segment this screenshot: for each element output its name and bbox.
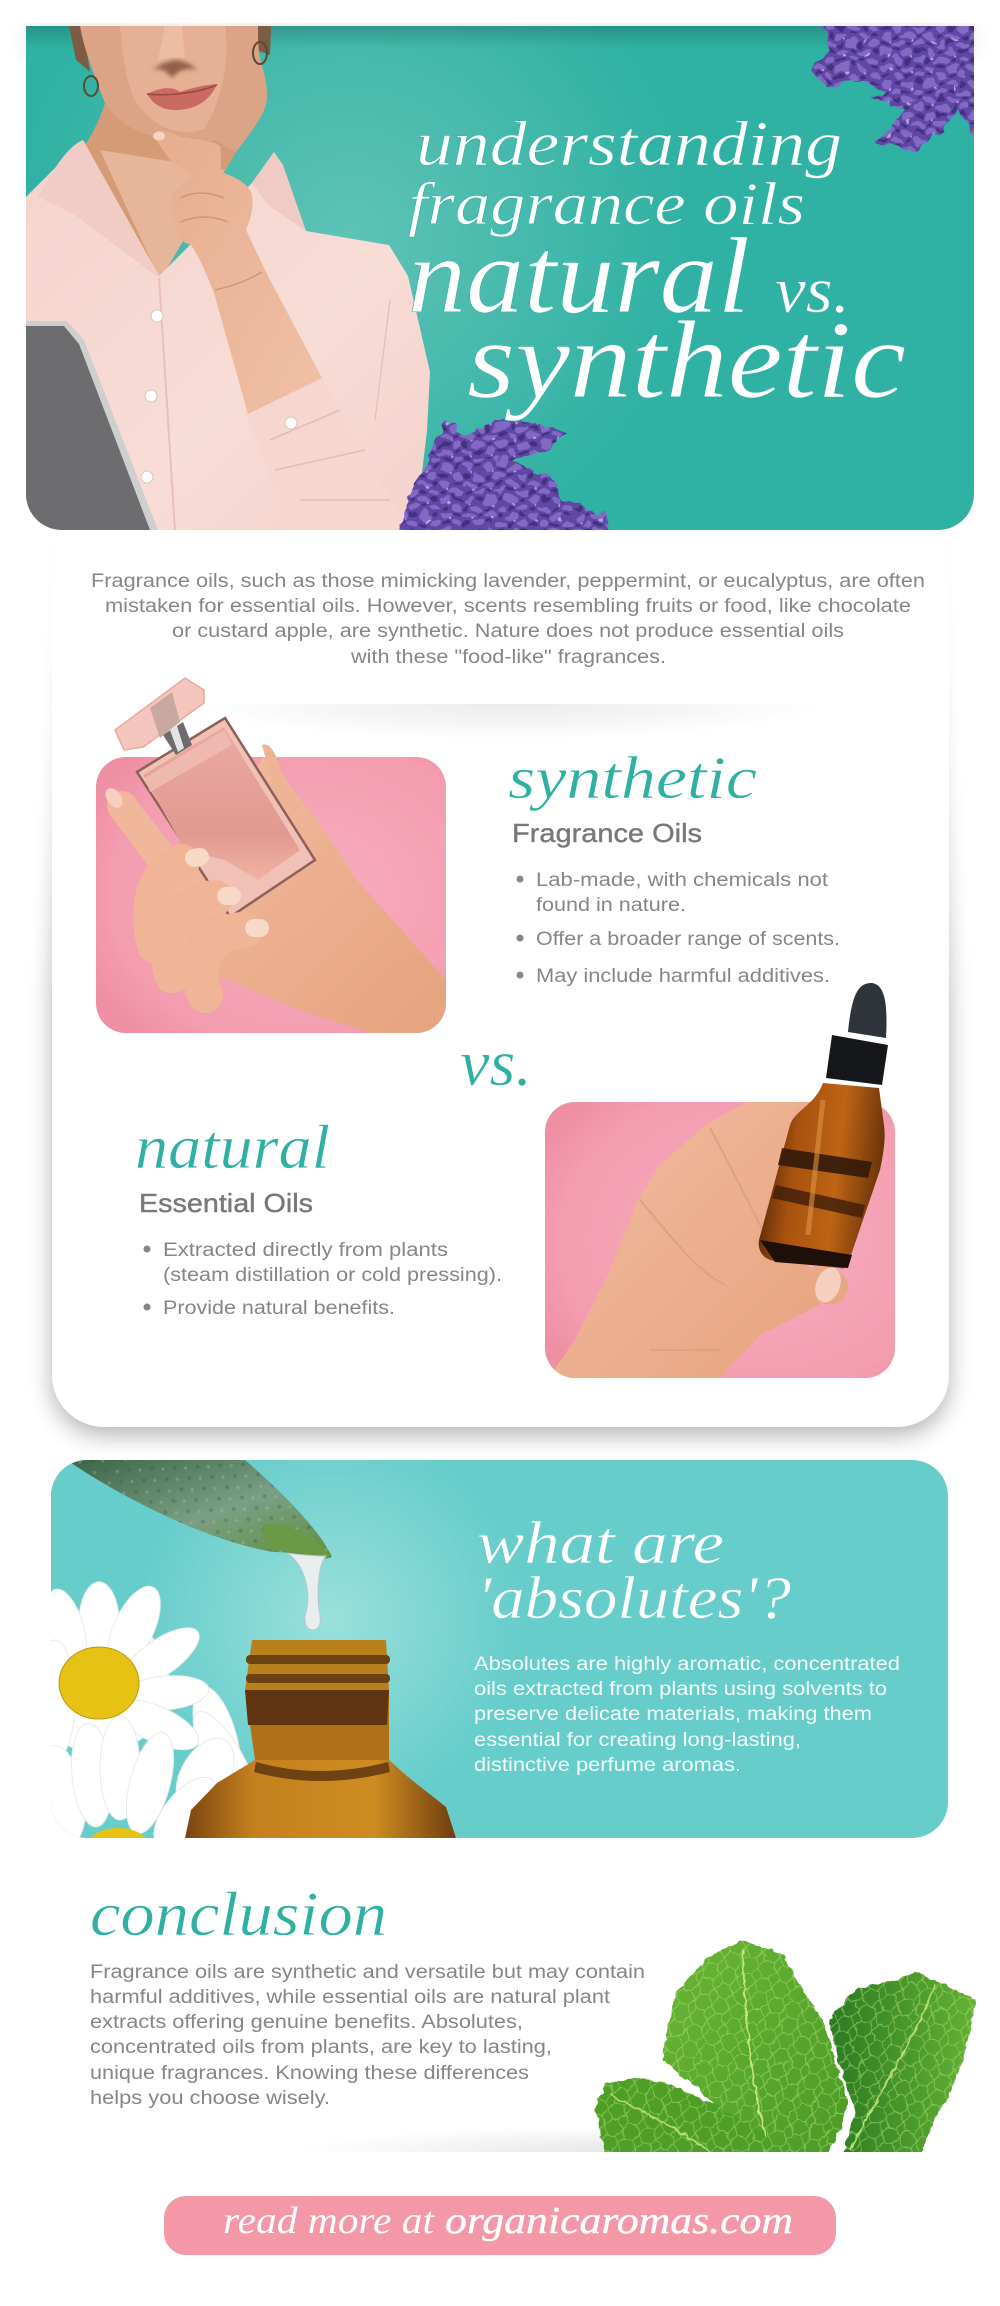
panel: white comparison card (52, 440, 949, 1435)
icon: daisies (51, 1582, 248, 1792)
title: synthetic (467, 299, 906, 421)
hand (554, 1102, 848, 1378)
text block: conclusion: concentrated oils from plants, are key to lasting, (90, 2037, 552, 2058)
heading: conclusion: conclusion (90, 1881, 387, 1949)
icon: drop (287, 1553, 326, 1630)
list: synthetic points: Offer a broader range of scents. (536, 929, 840, 950)
heading: vs.: vs. (460, 1027, 532, 1100)
hand (102, 744, 446, 1033)
button: read more (164, 2196, 836, 2255)
text block: absolutes: preserve delicate materials, making them (474, 1704, 872, 1725)
text block: conclusion: unique fragrances. Knowing these differences (90, 2063, 529, 2084)
title: natural (408, 217, 750, 336)
text block: conclusion (90, 1962, 645, 2109)
list: synthetic points: Lab-made, with chemicals not (536, 870, 829, 891)
title: understanding (416, 109, 842, 179)
hero outer shadow (30, 26, 970, 56)
button: read more: read more at (223, 2200, 436, 2242)
shirt (26, 140, 430, 530)
icon: second daisy centre (91, 1828, 145, 1838)
text block: absolutes (474, 1654, 900, 1776)
sleeve cuff (245, 376, 415, 530)
icon: aloe leaf (67, 1460, 332, 1558)
text block: conclusion: helps you choose wisely. (90, 2088, 330, 2109)
laptop (26, 321, 158, 530)
list: natural points: Extracted directly from plants (163, 1240, 448, 1261)
fingers (151, 857, 260, 995)
earrings (84, 42, 267, 96)
panel: what are absolutes (29, 1460, 948, 1857)
text block: introduction: mistaken for essential oils. However, scents resembling fruits or food, like chocolate (105, 596, 911, 617)
icon: lavender top right (811, 26, 974, 152)
hand and forearm (153, 131, 322, 414)
text block: absolutes: oils extracted from plants using solvents to (474, 1679, 887, 1700)
panel: pink photo with dropper bottle (545, 983, 895, 1378)
text block: introduction (91, 571, 925, 668)
text block: introduction: Fragrance oils, such as those mimicking lavender, peppermint, or eucalyptus, are often (91, 571, 925, 592)
heading: natural: natural (135, 1114, 330, 1182)
heading: synthetic: synthetic (508, 745, 757, 811)
list: synthetic points: found in nature. (536, 895, 686, 916)
heading: what are absolutes (477, 1510, 791, 1631)
title: fragrance oils (408, 171, 805, 237)
heading: what are absolutes: 'absolutes'? (477, 1565, 791, 1631)
perfume bottle (115, 678, 315, 917)
text block: conclusion: harmful additives, while essential oils are natural plant (90, 1987, 611, 2008)
list: synthetic points (516, 870, 840, 987)
text block: introduction: with these "food-like" fragrances. (350, 647, 666, 668)
panel: hero banner (26, 16, 984, 545)
title (408, 109, 906, 421)
icon: mint leaves (595, 1940, 976, 2160)
text block: absolutes: distinctive perfume aromas. (474, 1755, 741, 1776)
icon: lavender bottom (398, 418, 608, 530)
list: natural points: Provide natural benefits. (163, 1298, 395, 1319)
button: read more: organicaromas.com (445, 2200, 793, 2242)
subheading: fragrance oils: Fragrance Oils (512, 818, 702, 848)
text block: conclusion: Fragrance oils are synthetic and versatile but may contain (90, 1962, 645, 1983)
text block: introduction: or custard apple, are synthetic. Nature does not produce essential oils (172, 621, 844, 642)
shirt buttons (141, 310, 297, 483)
conclusion shadow (404, 2134, 604, 2152)
dropper bottle (759, 983, 888, 1268)
list: natural points: (steam distillation or cold pressing). (163, 1265, 502, 1286)
list: synthetic points: May include harmful additives. (536, 966, 830, 987)
list: natural points (144, 1240, 502, 1319)
right leaf (829, 1972, 976, 2160)
title: vs. (775, 254, 850, 327)
left leaf (594, 2078, 772, 2152)
text block: absolutes: essential for creating long-lasting, (474, 1730, 801, 1751)
intro shadow (311, 704, 708, 726)
text block: conclusion: extracts offering genuine benefits. Absolutes, (90, 2012, 523, 2033)
heading: what are absolutes: what are (477, 1510, 724, 1576)
subheading: essential oils: Essential Oils (139, 1188, 313, 1218)
icon: daisy centre (59, 1647, 139, 1719)
centre leaf (663, 1940, 848, 2160)
panel: pink photo with perfume bottle (96, 678, 446, 1033)
woman with laptop (26, 26, 430, 530)
icon: amber bottle (185, 1640, 456, 1838)
text block: absolutes: Absolutes are highly aromatic, concentrated (474, 1654, 900, 1675)
